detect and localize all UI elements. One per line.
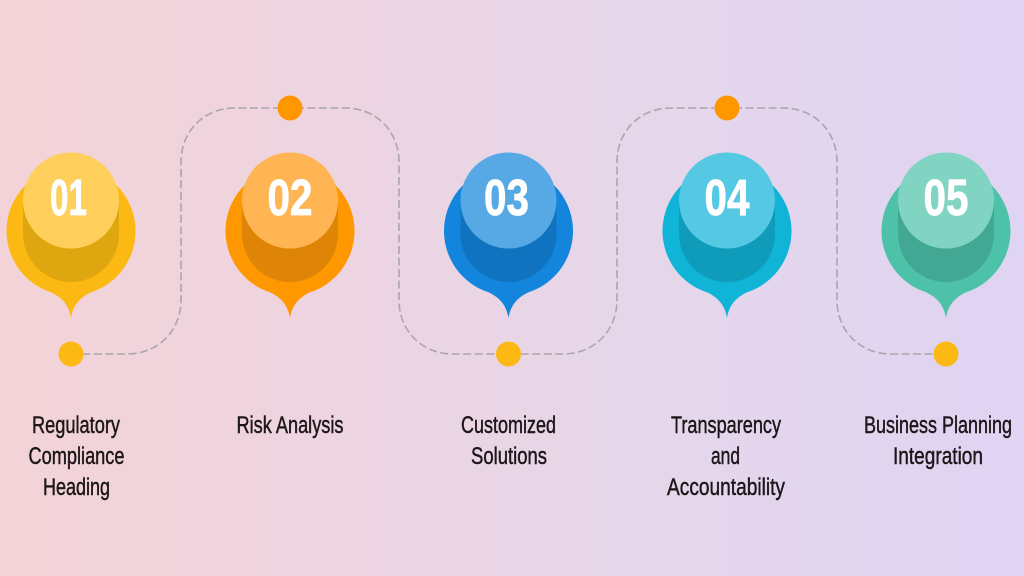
dashed connector path xyxy=(71,108,946,354)
pin 03 xyxy=(444,152,573,318)
step 1 marker dot xyxy=(58,342,84,366)
pin 01 xyxy=(6,152,136,318)
label: Customized Solutions: Customized xyxy=(461,412,556,439)
step 5 marker dot xyxy=(934,342,958,366)
label: Business Planning Integration: Integration xyxy=(893,443,983,470)
label: Business Planning Integration xyxy=(864,412,1012,470)
pin 01: 01 xyxy=(50,169,87,226)
pin 04 xyxy=(662,152,792,318)
label: Transparency and Accountability: Accountability xyxy=(667,474,785,501)
step 2 marker dot xyxy=(278,96,302,120)
pin 02 xyxy=(226,152,354,318)
step 4 marker dot xyxy=(714,96,740,120)
pin 05: 05 xyxy=(924,169,968,226)
label: Regulatory Compliance Heading: Compliance xyxy=(28,443,124,470)
pin 03: 03 xyxy=(484,169,529,226)
label: Customized Solutions: Solutions xyxy=(471,443,547,470)
label: Transparency and Accountability: and xyxy=(711,443,740,470)
label: Risk Analysis: Risk Analysis xyxy=(236,412,344,439)
label: Regulatory Compliance Heading: Heading xyxy=(43,474,110,501)
step 3 marker dot xyxy=(496,342,521,366)
pin 05 xyxy=(882,152,1010,318)
label: Regulatory Compliance Heading: Regulatory xyxy=(32,412,120,439)
label: Regulatory Compliance Heading xyxy=(28,412,124,501)
pin 02: 02 xyxy=(268,169,312,226)
label: Customized Solutions xyxy=(461,412,556,470)
pin 04: 04 xyxy=(704,169,750,226)
label: Transparency and Accountability: Transparency xyxy=(671,412,781,439)
label: Transparency and Accountability xyxy=(667,412,785,501)
